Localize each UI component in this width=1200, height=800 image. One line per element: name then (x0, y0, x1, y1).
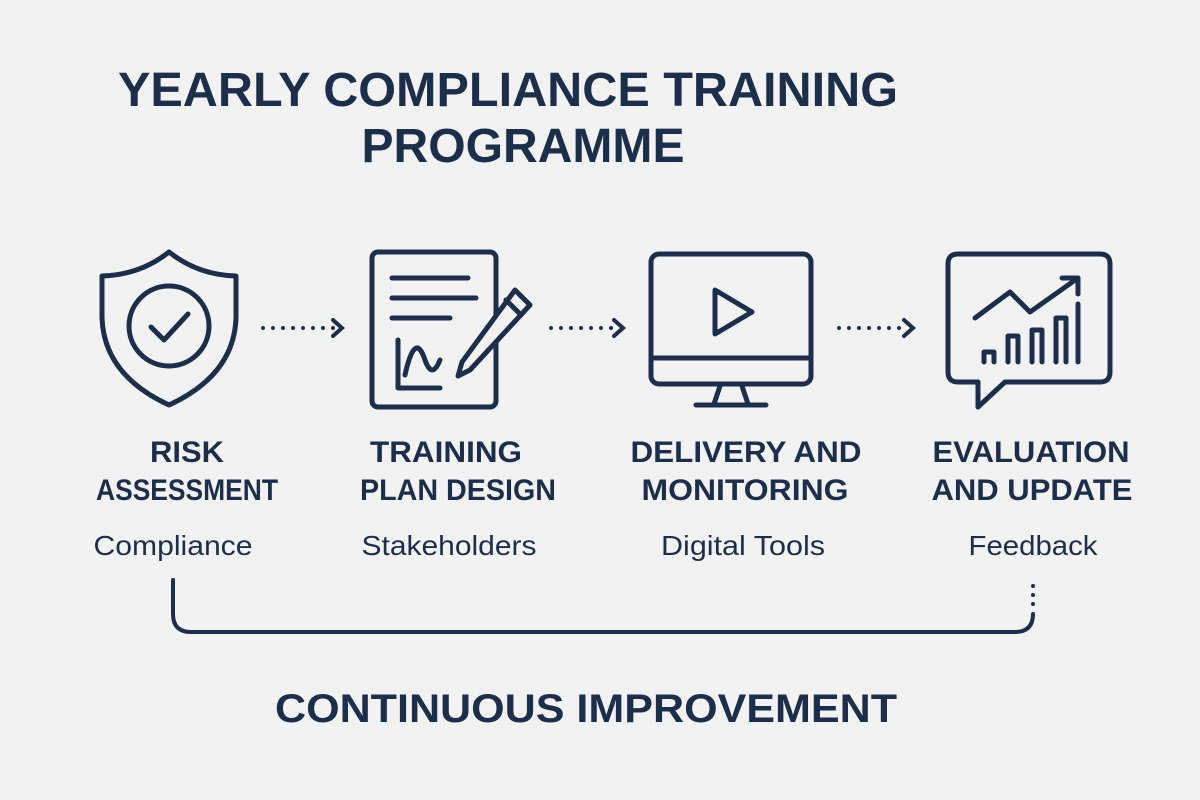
sublabels: Feedback (968, 530, 1099, 561)
sublabels (94, 530, 1099, 561)
label: delivery and monitoring: DELIVERY AND (630, 436, 862, 469)
icon: document with pencil (372, 252, 530, 407)
sublabels: Digital Tools (661, 530, 825, 561)
icon: shield with check (102, 252, 236, 405)
arrow 2 (551, 320, 623, 336)
title: YEARLY COMPLIANCE TRAINING (118, 64, 898, 117)
label: evaluation and update: EVALUATION (932, 436, 1130, 469)
label: risk assessment: RISK (150, 436, 224, 469)
label: training plan design (360, 436, 556, 507)
title: PROGRAMME (362, 120, 684, 173)
label: evaluation and update (932, 436, 1132, 507)
labels (96, 436, 1132, 507)
icon: chat with chart (948, 254, 1110, 407)
label: training plan design: TRAINING (370, 436, 522, 469)
sublabels: Compliance (94, 530, 252, 561)
arrow 3 (839, 320, 913, 336)
icon: monitor with play (651, 254, 811, 405)
footer: continuous improvement: CONTINUOUS IMPROVEMENT (275, 687, 897, 731)
label: training plan design: PLAN DESIGN (360, 474, 556, 507)
label: risk assessment: ASSESSMENT (96, 474, 278, 507)
feedback loop bracket (173, 578, 1033, 632)
arrow 1 (263, 320, 342, 336)
label: delivery and monitoring: MONITORING (642, 474, 848, 507)
label: risk assessment (96, 436, 278, 507)
label: evaluation and update: AND UPDATE (932, 474, 1132, 507)
sublabels: Stakeholders (362, 530, 536, 561)
label: delivery and monitoring (630, 436, 862, 507)
title (118, 64, 898, 173)
